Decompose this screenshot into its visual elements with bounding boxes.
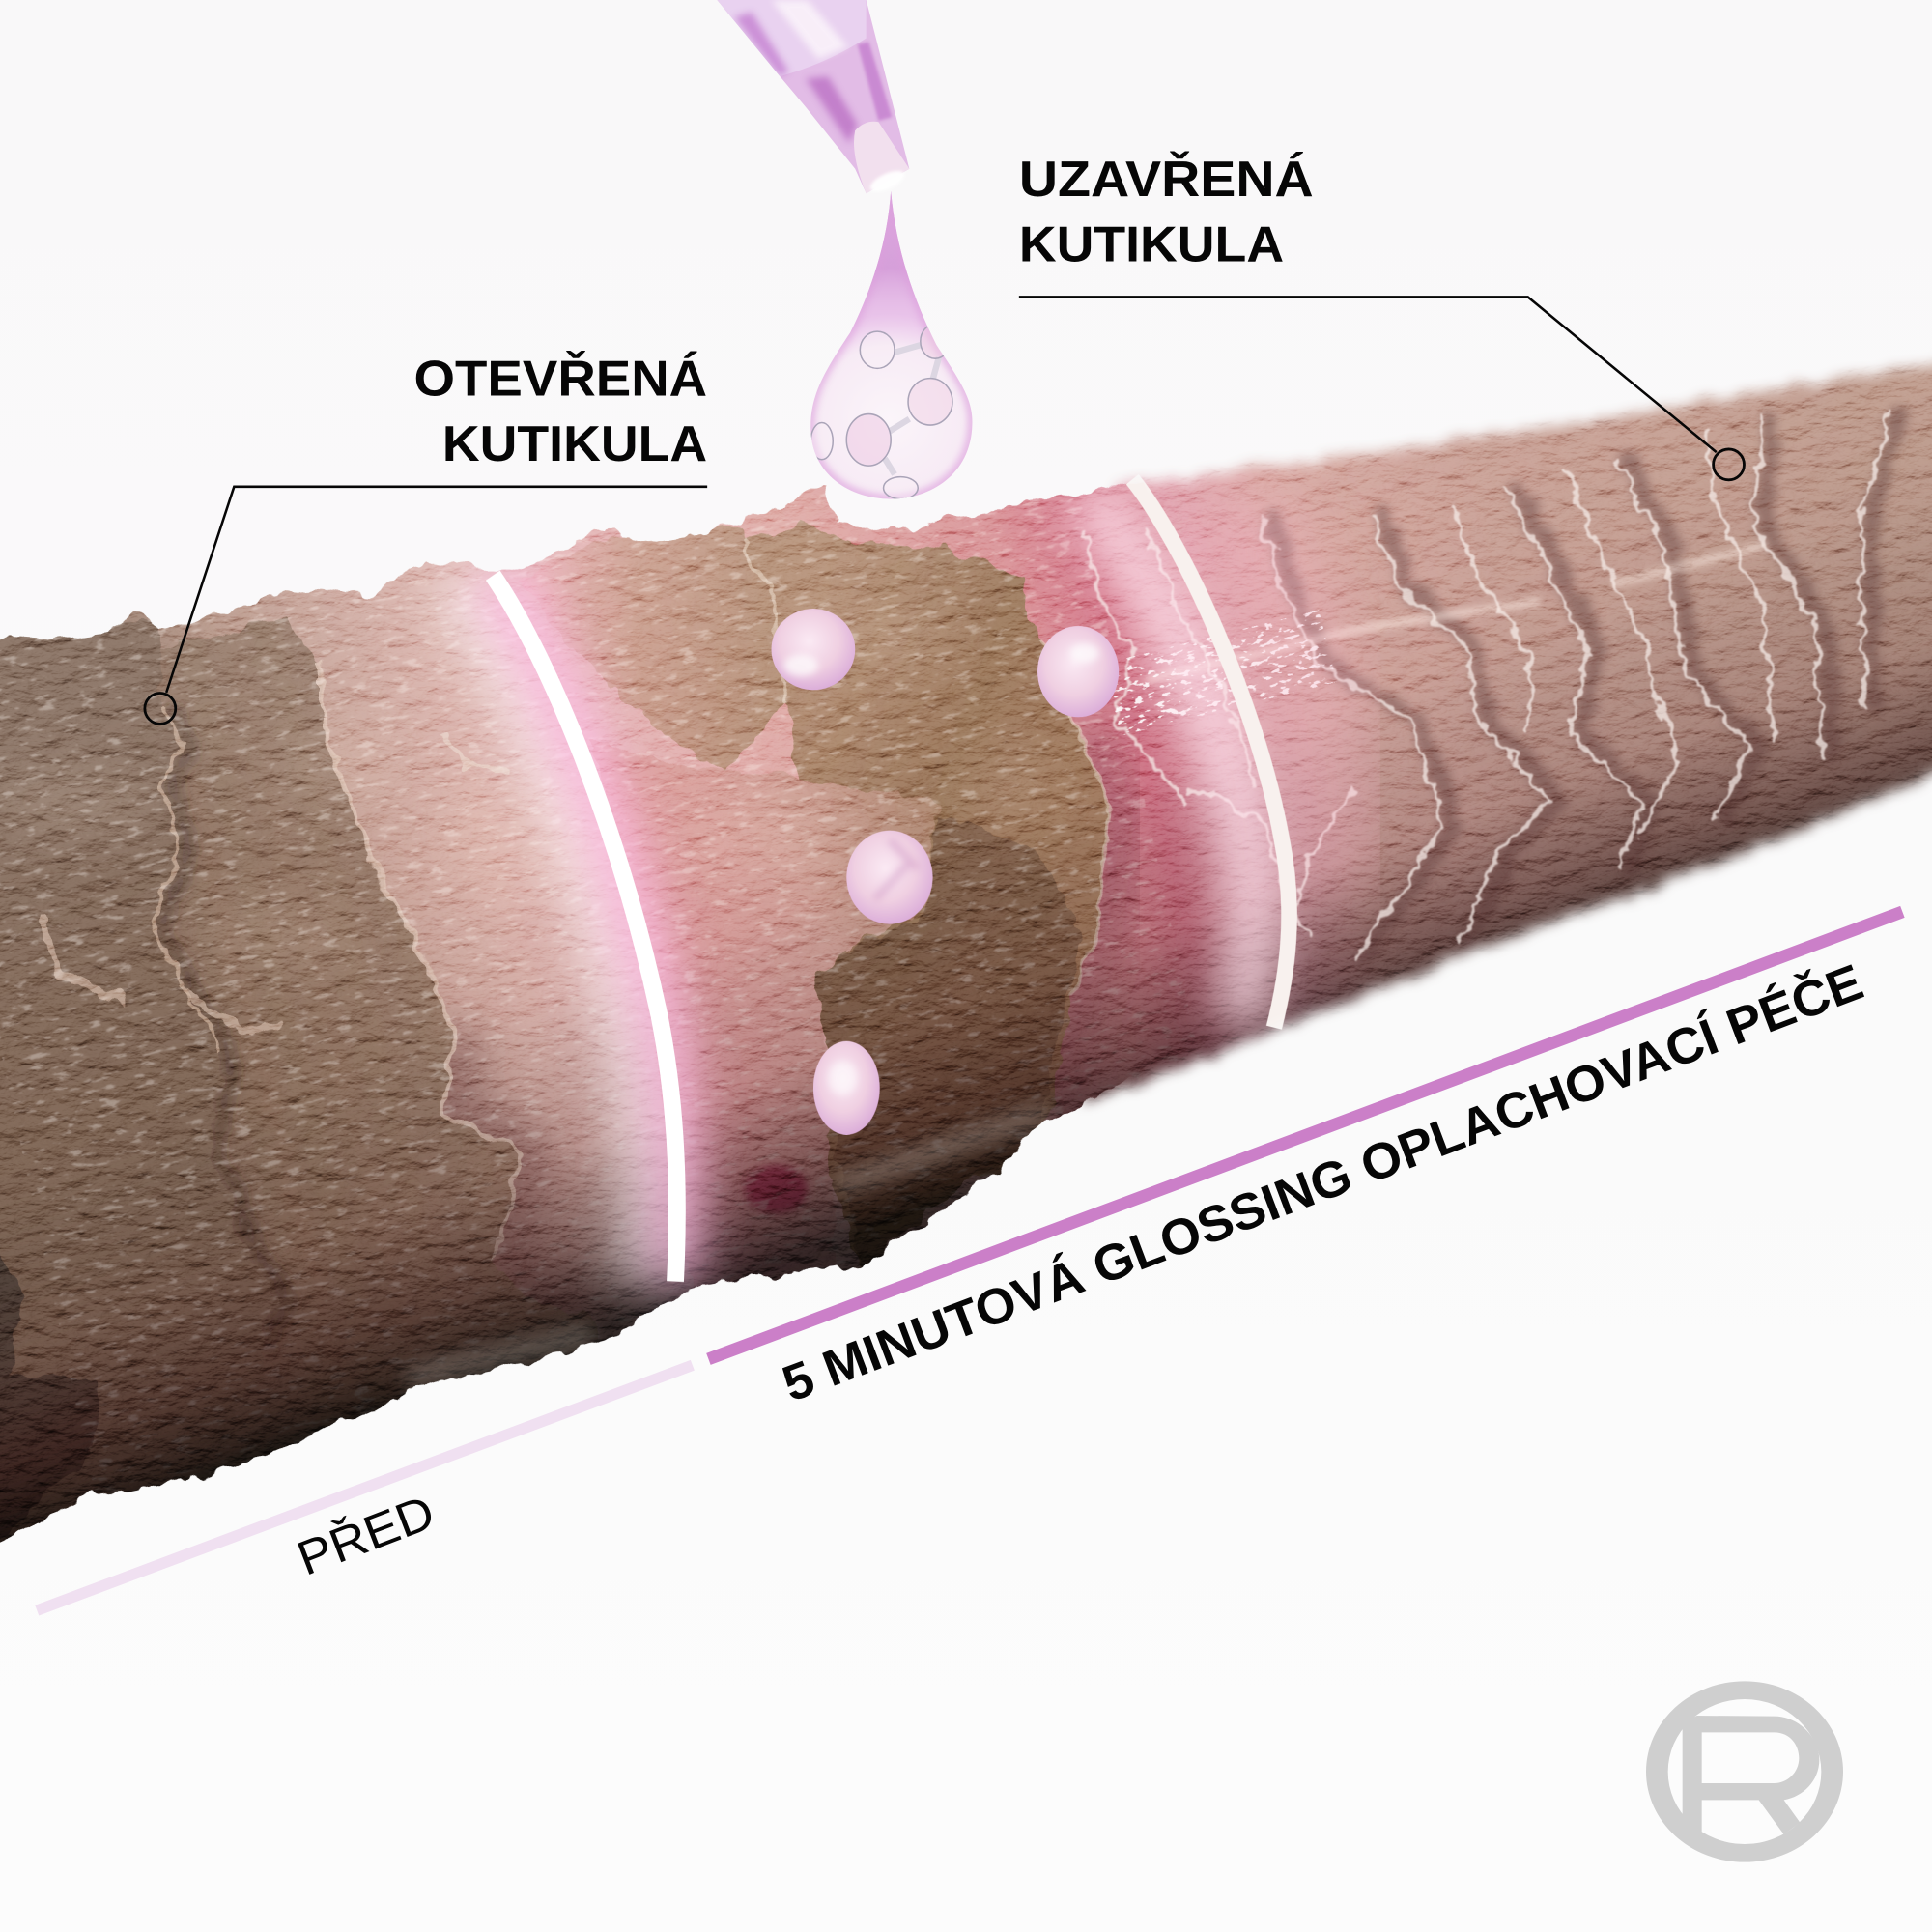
label: 5 minute treatment: 5 MINUTOVÁ GLOSSING OPLACHOVACÍ PÉČE <box>775 953 1870 1413</box>
logo ring <box>1646 1681 1843 1862</box>
crack highlights <box>1084 412 1890 974</box>
nozzle highlight <box>867 166 907 196</box>
leader marker left <box>145 693 176 724</box>
left cuticle plate B <box>74 616 600 1516</box>
centre lower dark plate <box>813 813 1084 1269</box>
collar stripes <box>771 0 848 59</box>
plate edge highlights <box>37 542 1109 1260</box>
hair depth shading <box>0 308 1932 1602</box>
leader line right <box>1019 297 1717 452</box>
label: open cuticle <box>145 350 707 724</box>
timeline bar: before <box>37 1365 693 1610</box>
left cuticle plate A <box>0 616 277 1577</box>
dropper collar <box>717 0 867 76</box>
deep pink fold <box>744 1164 809 1213</box>
dropper <box>717 0 909 196</box>
shadow behind left plate on pink zone <box>443 1030 604 1324</box>
right cuticle scale cracks <box>1084 412 1900 974</box>
bottom left dark plate <box>0 1182 99 1571</box>
surface texture <box>0 308 1932 1602</box>
drop shape <box>810 191 972 499</box>
timeline bar: after <box>708 912 1902 1359</box>
crack shadows <box>1271 412 1900 960</box>
drop neck colour <box>813 185 974 352</box>
shadow right of the centre plate <box>1054 727 1115 1115</box>
dropper dark band <box>806 76 858 143</box>
gloss streak <box>1146 545 1767 680</box>
leader line left <box>166 487 707 693</box>
bead 1 <box>771 609 855 690</box>
wet sheen flecks <box>0 210 1264 1610</box>
heading otevřená kutikula: OTEVŘENÁ <box>414 350 707 407</box>
soft light patches <box>0 611 1060 969</box>
collar purple stripe <box>734 13 788 76</box>
drop rim <box>810 191 972 499</box>
logo letter R <box>1683 1716 1819 1835</box>
bead 3 <box>846 831 933 924</box>
heading uzavřená kutikula: UZAVŘENÁ <box>1019 151 1314 208</box>
shadow under plate A edge <box>160 705 287 1348</box>
label: closed cuticle <box>1019 151 1744 480</box>
leader marker right <box>1714 449 1744 480</box>
centre brown cuticle plate <box>746 524 1109 1269</box>
pink blended plate <box>591 739 936 1288</box>
hair strand illustration <box>0 356 1932 1543</box>
label: before: PŘED <box>290 1485 441 1586</box>
molecule <box>810 324 952 499</box>
label: closed cuticle: KUTIKULA <box>1019 216 1284 272</box>
label: open cuticle: KUTIKULA <box>442 416 707 472</box>
dropper body <box>717 0 909 193</box>
bead 2 <box>1037 626 1119 717</box>
glow ring before <box>450 576 677 1282</box>
logo <box>1646 1681 1843 1862</box>
bead 4 <box>813 1041 880 1135</box>
dropper right edge <box>858 42 892 121</box>
glow ring after <box>1084 479 1331 1028</box>
hair base colour <box>123 359 1932 1374</box>
gloss sparkles <box>1103 611 1337 736</box>
tan upper plate <box>518 527 788 770</box>
serum drop with molecule <box>810 185 974 499</box>
dropper nozzle <box>854 122 909 193</box>
fibrous underside <box>407 1112 1047 1378</box>
